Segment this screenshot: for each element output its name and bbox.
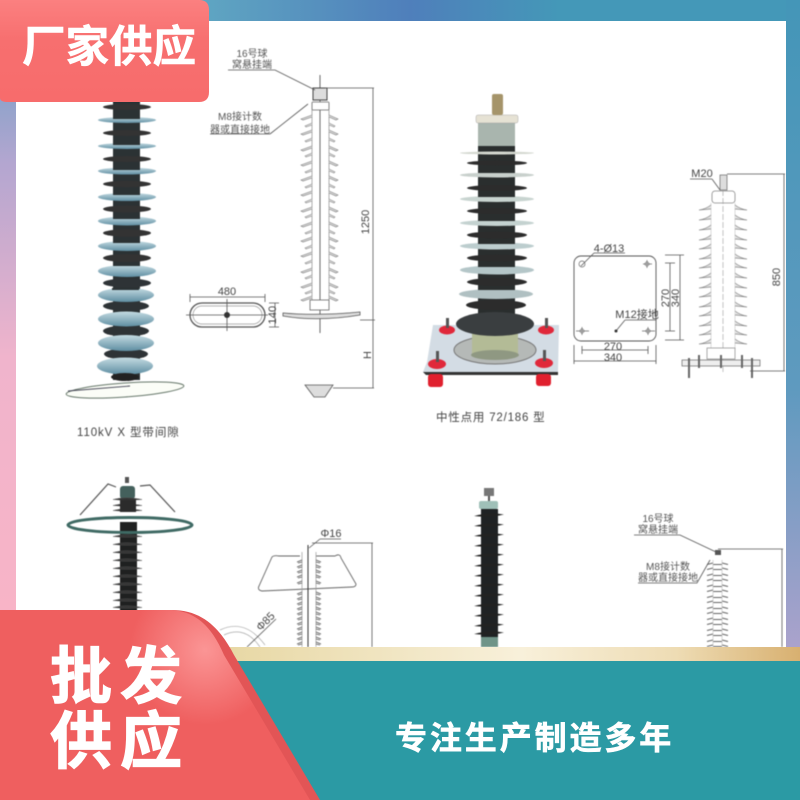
callout: 16 ball socket lower: 16号球: [642, 512, 674, 525]
dimension 270 horizontal: 270: [604, 341, 622, 353]
red corner panel: [0, 610, 320, 800]
label M12 ground: M12接地: [615, 308, 659, 321]
dimension 340 horizontal: 340: [604, 352, 622, 364]
dimension 140: 140: [267, 306, 279, 324]
heading: supply: 供应: [50, 708, 190, 777]
dimension 270 vertical: 270: [660, 289, 672, 307]
callout: suspension end lower: 窝悬挂端: [638, 523, 678, 536]
callout: direct ground lower: 器或直接接地: [638, 571, 698, 584]
drawing: 1250 arrester outline: [210, 47, 375, 397]
drawing: M8 arrester outline: [634, 512, 783, 647]
callout: M8 counter lower: M8接计数: [646, 560, 690, 573]
dimension 480: 480: [218, 286, 236, 298]
badge text: 厂家供应: [22, 24, 196, 72]
caption: neutral point type: 中性点用 72/186 型: [436, 410, 545, 424]
top gradient strip: [200, 0, 800, 21]
caption: 110kV type: 110kV X 型带间隙: [77, 425, 180, 439]
drawing: phi16 arrester with frame: [220, 528, 373, 647]
top-left badge: [0, 0, 209, 102]
callout: suspension end: 窝悬挂端: [232, 58, 272, 71]
label 4-hole: 4-Ø13: [594, 243, 624, 255]
footer slogan: 专注生产制造多年: [395, 720, 674, 756]
drawing: 850 arrester outline: [682, 168, 785, 378]
teal footer band: [200, 661, 800, 800]
drawing: square mounting plate: [574, 243, 684, 364]
right gradient strip: [786, 0, 800, 650]
photo: 110kV X type arrester with gap: [66, 100, 184, 401]
callout: 16 ball socket: 16号球: [236, 47, 268, 60]
heading: wholesale: 批发: [50, 643, 190, 712]
label M20: M20: [691, 168, 713, 180]
photo: arrester with grading ring: [68, 477, 192, 612]
callout: M8 counter: M8接计数: [218, 110, 262, 123]
dimension 340 vertical: 340: [670, 289, 682, 307]
dimension 850: 850: [771, 268, 783, 286]
label phi85: Φ85: [254, 610, 278, 634]
callout: direct ground: 器或直接接地: [210, 123, 270, 136]
photo: neutral point 72/186 arrester: [423, 94, 559, 387]
label phi16: Φ16: [320, 528, 342, 540]
dimension H: H: [362, 351, 374, 359]
left gradient strip: [0, 0, 16, 650]
gold divider bar: [180, 647, 800, 661]
dimension 1250: 1250: [360, 210, 372, 234]
drawing: 480 x 140 oval ring: [186, 286, 279, 331]
photo: slim arrester: [474, 488, 504, 647]
